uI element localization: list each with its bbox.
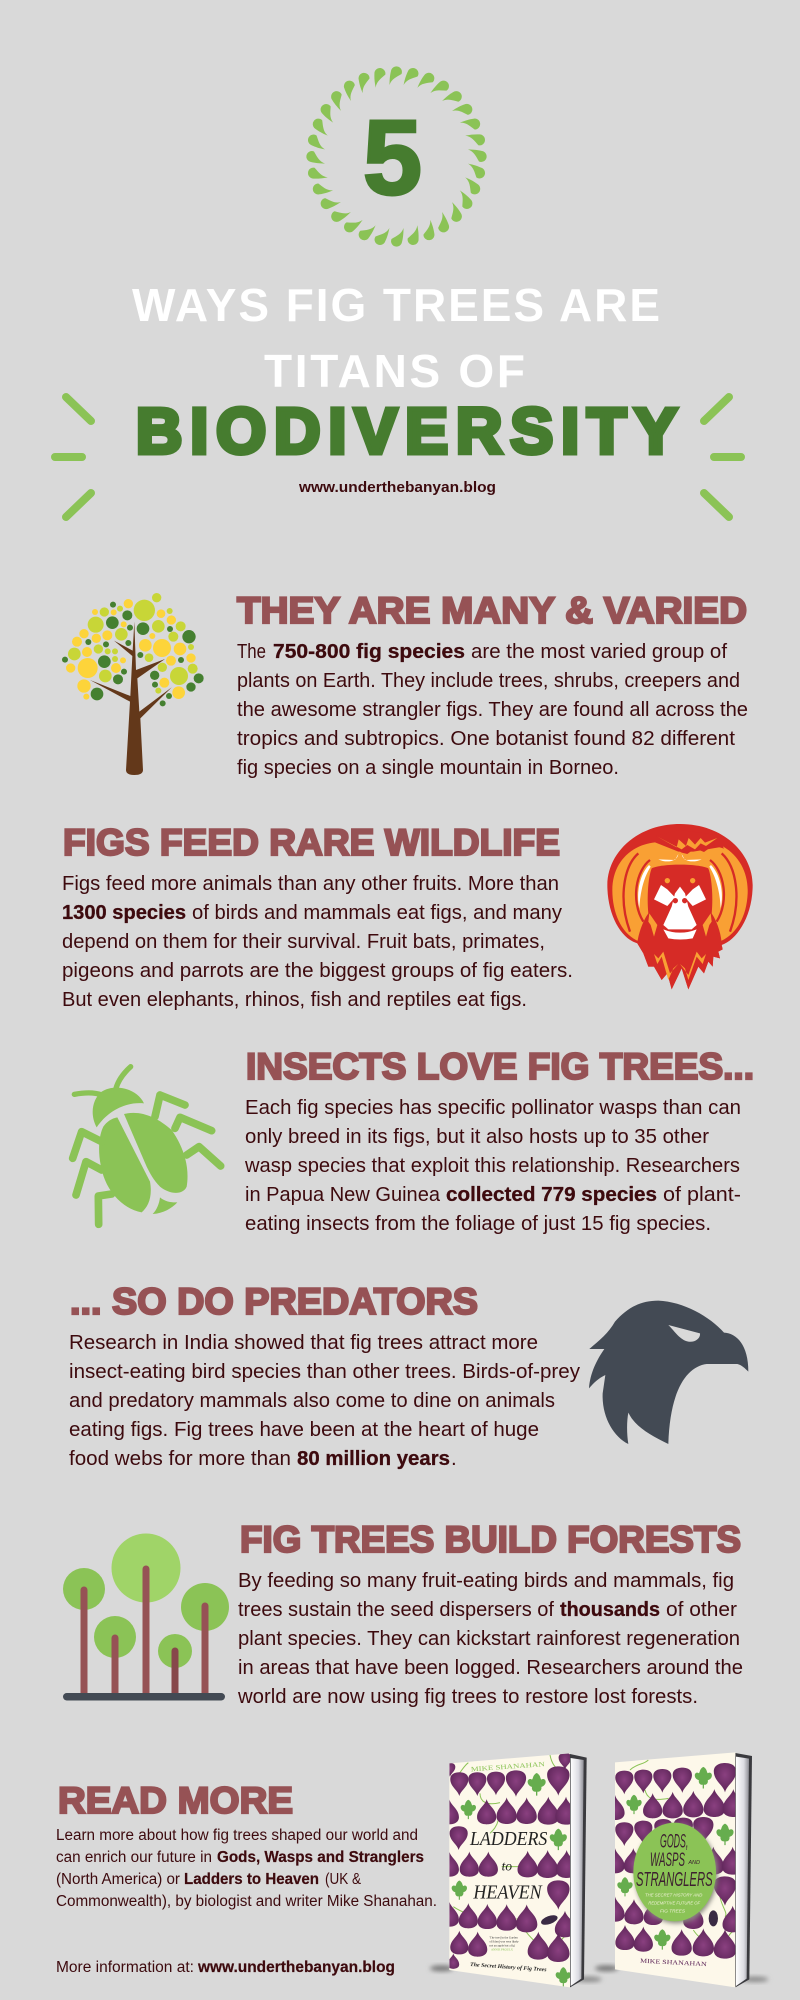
text block: pigeons and parrots are the biggest groups of fig eaters. — [62, 959, 573, 982]
text block: wasp species that exploit this relationship. Researchers — [244, 1154, 740, 1177]
panel: insects love fig trees — [73, 1046, 754, 1235]
book: Gods, Wasps and Stranglers: THE SECRET HISTORY AND — [645, 1893, 703, 1899]
heading: ... SO DO PREDATORS — [70, 1281, 478, 1322]
book: Ladders to Heaven: of Eden] was very likely — [489, 1939, 519, 1943]
text block: insect-eating bird species than other trees. Birds-of-prey — [69, 1360, 581, 1383]
text block: are the most varied group of — [471, 640, 727, 663]
text block: (UK & — [325, 1871, 362, 1888]
heading: THEY ARE MANY & VARIED — [237, 590, 747, 631]
icon: leaf wreath — [306, 66, 487, 247]
text block: The — [237, 640, 266, 663]
text block: in areas that have been logged. Researchers around the — [238, 1656, 743, 1679]
more information line: More information at: — [56, 1959, 194, 1976]
text block: world are now using fig trees to restore lost forests. — [237, 1685, 698, 1708]
text block — [244, 1096, 741, 1235]
text block — [56, 1827, 437, 1910]
book: Ladders to Heaven: MIKE SHANAHAN — [471, 1761, 545, 1773]
text block: Learn more about how fig trees shaped our world and — [56, 1827, 418, 1844]
text block: eating figs. Fig trees have been at the heart of huge — [69, 1418, 539, 1441]
text block: Ladders to Heaven — [184, 1871, 319, 1888]
text block — [237, 640, 748, 779]
panel: figs feed rare wildlife — [62, 822, 753, 1011]
big number 5: 5 — [363, 99, 422, 217]
title — [132, 279, 677, 467]
text block: plant species. They can kickstart rainforest regeneration — [238, 1627, 740, 1650]
text block: only breed in its figs, but it also hosts up to 35 other — [245, 1125, 709, 1148]
text block: . — [451, 1447, 457, 1470]
icon: tree — [62, 593, 204, 775]
icon: beetle — [73, 1067, 221, 1224]
text block: But even elephants, rhinos, fish and reptiles eat figs. — [62, 988, 527, 1011]
text block: the awesome strangler figs. They are found all across the — [237, 698, 748, 721]
book: Gods, Wasps and Stranglers — [595, 1752, 768, 1987]
text block: of plant- — [663, 1183, 741, 1206]
heading: INSECTS LOVE FIG TREES... — [246, 1046, 754, 1087]
book: Ladders to Heaven: The Secret History of Fig Trees — [470, 1962, 548, 1973]
heading: FIGS FEED RARE WILDLIFE — [63, 822, 560, 863]
text block: Research in India showed that fig trees attract more — [69, 1331, 538, 1354]
text block: tropics and subtropics. One botanist found 82 different — [237, 727, 735, 750]
panel: many and varied — [62, 590, 748, 779]
heading: FIG TREES BUILD FORESTS — [240, 1519, 741, 1560]
text block: food webs for more than — [69, 1447, 291, 1470]
text block: 1300 species — [62, 901, 186, 924]
book: Gods, Wasps and Stranglers: REDEMPTIVE FUTURE OF — [648, 1901, 701, 1907]
text block: 80 million years — [297, 1447, 450, 1470]
text block: in Papua New Guinea — [245, 1183, 441, 1206]
panel: fig trees build forests — [63, 1519, 743, 1708]
text block: depend on them for their survival. Fruit bats, primates, — [62, 930, 545, 953]
icon: eagle head — [589, 1301, 748, 1444]
book: Ladders to Heaven: LADDERS — [469, 1828, 547, 1850]
book: Ladders to Heaven: ANNIE PROULX — [491, 1948, 514, 1952]
text block: of other — [666, 1598, 737, 1621]
title: TITANS OF — [264, 345, 525, 397]
book: Gods, Wasps and Stranglers: FIG TREES — [660, 1908, 686, 1914]
text block — [237, 1569, 743, 1708]
book: Gods, Wasps and Stranglers: GODS, — [660, 1831, 688, 1852]
book: Ladders to Heaven: not an apple but a fig' — [489, 1943, 516, 1947]
text block: collected 779 species — [446, 1183, 657, 1206]
book: Ladders to Heaven: to — [502, 1859, 512, 1874]
book: Gods, Wasps and Stranglers: STRANGLERS — [636, 1868, 713, 1891]
text block: trees sustain the seed dispersers of — [238, 1598, 554, 1621]
icon: forest — [63, 1534, 229, 1700]
panel: read more — [56, 1752, 768, 1987]
text block: By feeding so many fruit-eating birds and mammals, fig — [238, 1569, 734, 1592]
heading: READ MORE — [58, 1780, 293, 1821]
decorative burst lines — [55, 397, 741, 517]
panel: so do predators — [69, 1281, 748, 1470]
book: Gods, Wasps and Stranglers: WASPS — [650, 1850, 685, 1871]
title: WAYS FIG TREES ARE — [132, 279, 660, 331]
book: Ladders to Heaven: HEAVEN — [472, 1881, 543, 1903]
text block: (North America) or — [56, 1871, 180, 1888]
text block: plants on Earth. They include trees, shrubs, creepers and — [237, 669, 740, 692]
book: Gods, Wasps and Stranglers: MIKE SHANAHAN — [640, 1958, 707, 1968]
title: BIODIVERSITY — [136, 395, 677, 467]
text block: thousands — [560, 1598, 660, 1621]
text block — [62, 872, 573, 1011]
text block: eating insects from the foliage of just 15 fig species. — [245, 1212, 711, 1235]
book: Gods, Wasps and Stranglers: AND — [687, 1860, 700, 1866]
text block: of birds and mammals eat figs, and many — [192, 901, 563, 924]
book: Ladders to Heaven: 'The tree [in the Garden — [489, 1935, 518, 1939]
website url: www.underthebanyan.blog — [298, 480, 496, 496]
text block: and predatory mammals also come to dine on animals — [69, 1389, 555, 1412]
more information line — [56, 1959, 395, 1976]
text block: Figs feed more animals than any other fruits. More than — [62, 872, 559, 895]
icon: orangutan — [607, 824, 753, 989]
more information line: www.underthebanyan.blog — [197, 1959, 395, 1976]
text block — [69, 1331, 581, 1470]
book: Ladders to Heaven — [430, 1753, 602, 1987]
text block: can enrich our future in — [56, 1849, 212, 1866]
text block: Gods, Wasps and Stranglers — [217, 1849, 424, 1866]
text block: fig species on a single mountain in Borneo. — [237, 756, 619, 779]
text block: Commonwealth), by biologist and writer Mike Shanahan. — [56, 1893, 437, 1910]
text block: Each fig species has specific pollinator wasps than can — [245, 1096, 741, 1119]
text block: 750-800 fig species — [273, 640, 465, 663]
